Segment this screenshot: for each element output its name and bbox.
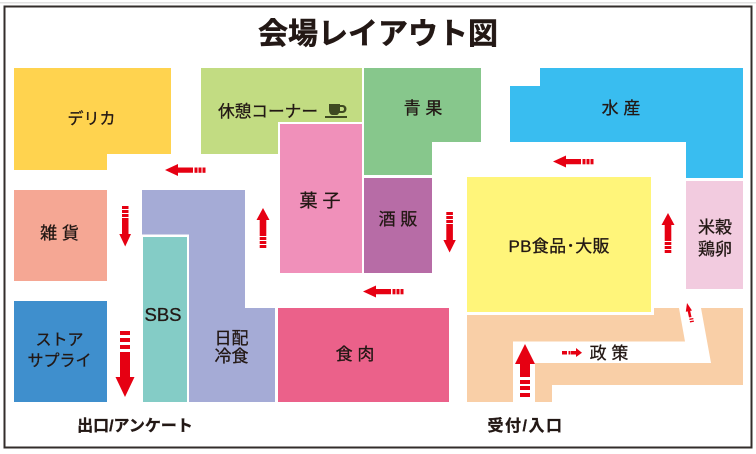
panel: PB食品・大販: PB食品･大販 bbox=[508, 237, 610, 256]
panel: 水産: 水 産 bbox=[602, 99, 640, 118]
panel: 休憩コーナー bbox=[201, 68, 362, 154]
panel: デリカ: デリカ bbox=[67, 109, 116, 128]
panel: PB食品・大販 bbox=[467, 177, 651, 312]
panel: 米穀鶏卵 bbox=[686, 181, 743, 289]
arrow: down beside 酒販 bbox=[443, 212, 456, 252]
panel: 米穀鶏卵: 米穀 bbox=[698, 218, 732, 237]
panel: 日配冷食: 冷食 bbox=[214, 347, 248, 366]
arrow: up beside 米穀 bbox=[662, 213, 674, 253]
panel: 米穀鶏卵: 鶏卵 bbox=[698, 240, 732, 259]
panel: 日配冷食 bbox=[142, 190, 275, 402]
panel: 雑貨 bbox=[14, 190, 107, 281]
panel: 政策 bbox=[467, 308, 743, 402]
panel: 菓子 bbox=[280, 124, 362, 273]
arrow: small right to 政策 bbox=[562, 348, 582, 357]
panel: ストアサプライ: サプライ bbox=[27, 352, 92, 370]
arrow: left, upper right aisle bbox=[553, 156, 594, 168]
label: entrance: 受付/入口 bbox=[488, 416, 563, 435]
panel: 水産 bbox=[510, 68, 743, 178]
arrow: left, upper left aisle bbox=[165, 164, 206, 176]
panel: 食肉 bbox=[278, 308, 449, 402]
panel: 酒販: 酒 販 bbox=[379, 210, 417, 229]
panel: ストアサプライ: ストア bbox=[35, 332, 84, 349]
arrow: up beside 菓子 bbox=[256, 208, 270, 248]
panel: 政策: 政 策 bbox=[590, 344, 628, 363]
panel: ストアサプライ bbox=[14, 301, 107, 402]
panel: SBS bbox=[143, 237, 187, 402]
title: 会場レイアウト図 bbox=[258, 18, 498, 51]
panel: 菓子: 菓 子 bbox=[299, 191, 341, 211]
arrow: down beside 雑貨 bbox=[119, 206, 131, 246]
panel: デリカ bbox=[14, 68, 171, 170]
panel: 食肉: 食 肉 bbox=[336, 345, 374, 364]
panel: 日配冷食: 日配 bbox=[214, 329, 248, 348]
panel: 青果 bbox=[364, 68, 481, 175]
panel: 雑貨: 雑 貨 bbox=[40, 224, 79, 243]
arrow: left, middle aisle bbox=[363, 286, 404, 298]
arrow: entrance, large up bbox=[515, 344, 535, 397]
label: exit: 出口/アンケート bbox=[77, 417, 193, 435]
panel: 青果: 青 果 bbox=[404, 99, 442, 118]
panel: SBS: SBS bbox=[144, 304, 182, 325]
icon: coffee cup bbox=[325, 104, 347, 118]
arrow: exit, large down bbox=[116, 331, 134, 397]
panel: 休憩コーナー: 休憩コーナー bbox=[218, 102, 318, 121]
panel: 酒販 bbox=[364, 178, 432, 273]
arrow: small diagonal to 米穀 bbox=[686, 303, 694, 322]
